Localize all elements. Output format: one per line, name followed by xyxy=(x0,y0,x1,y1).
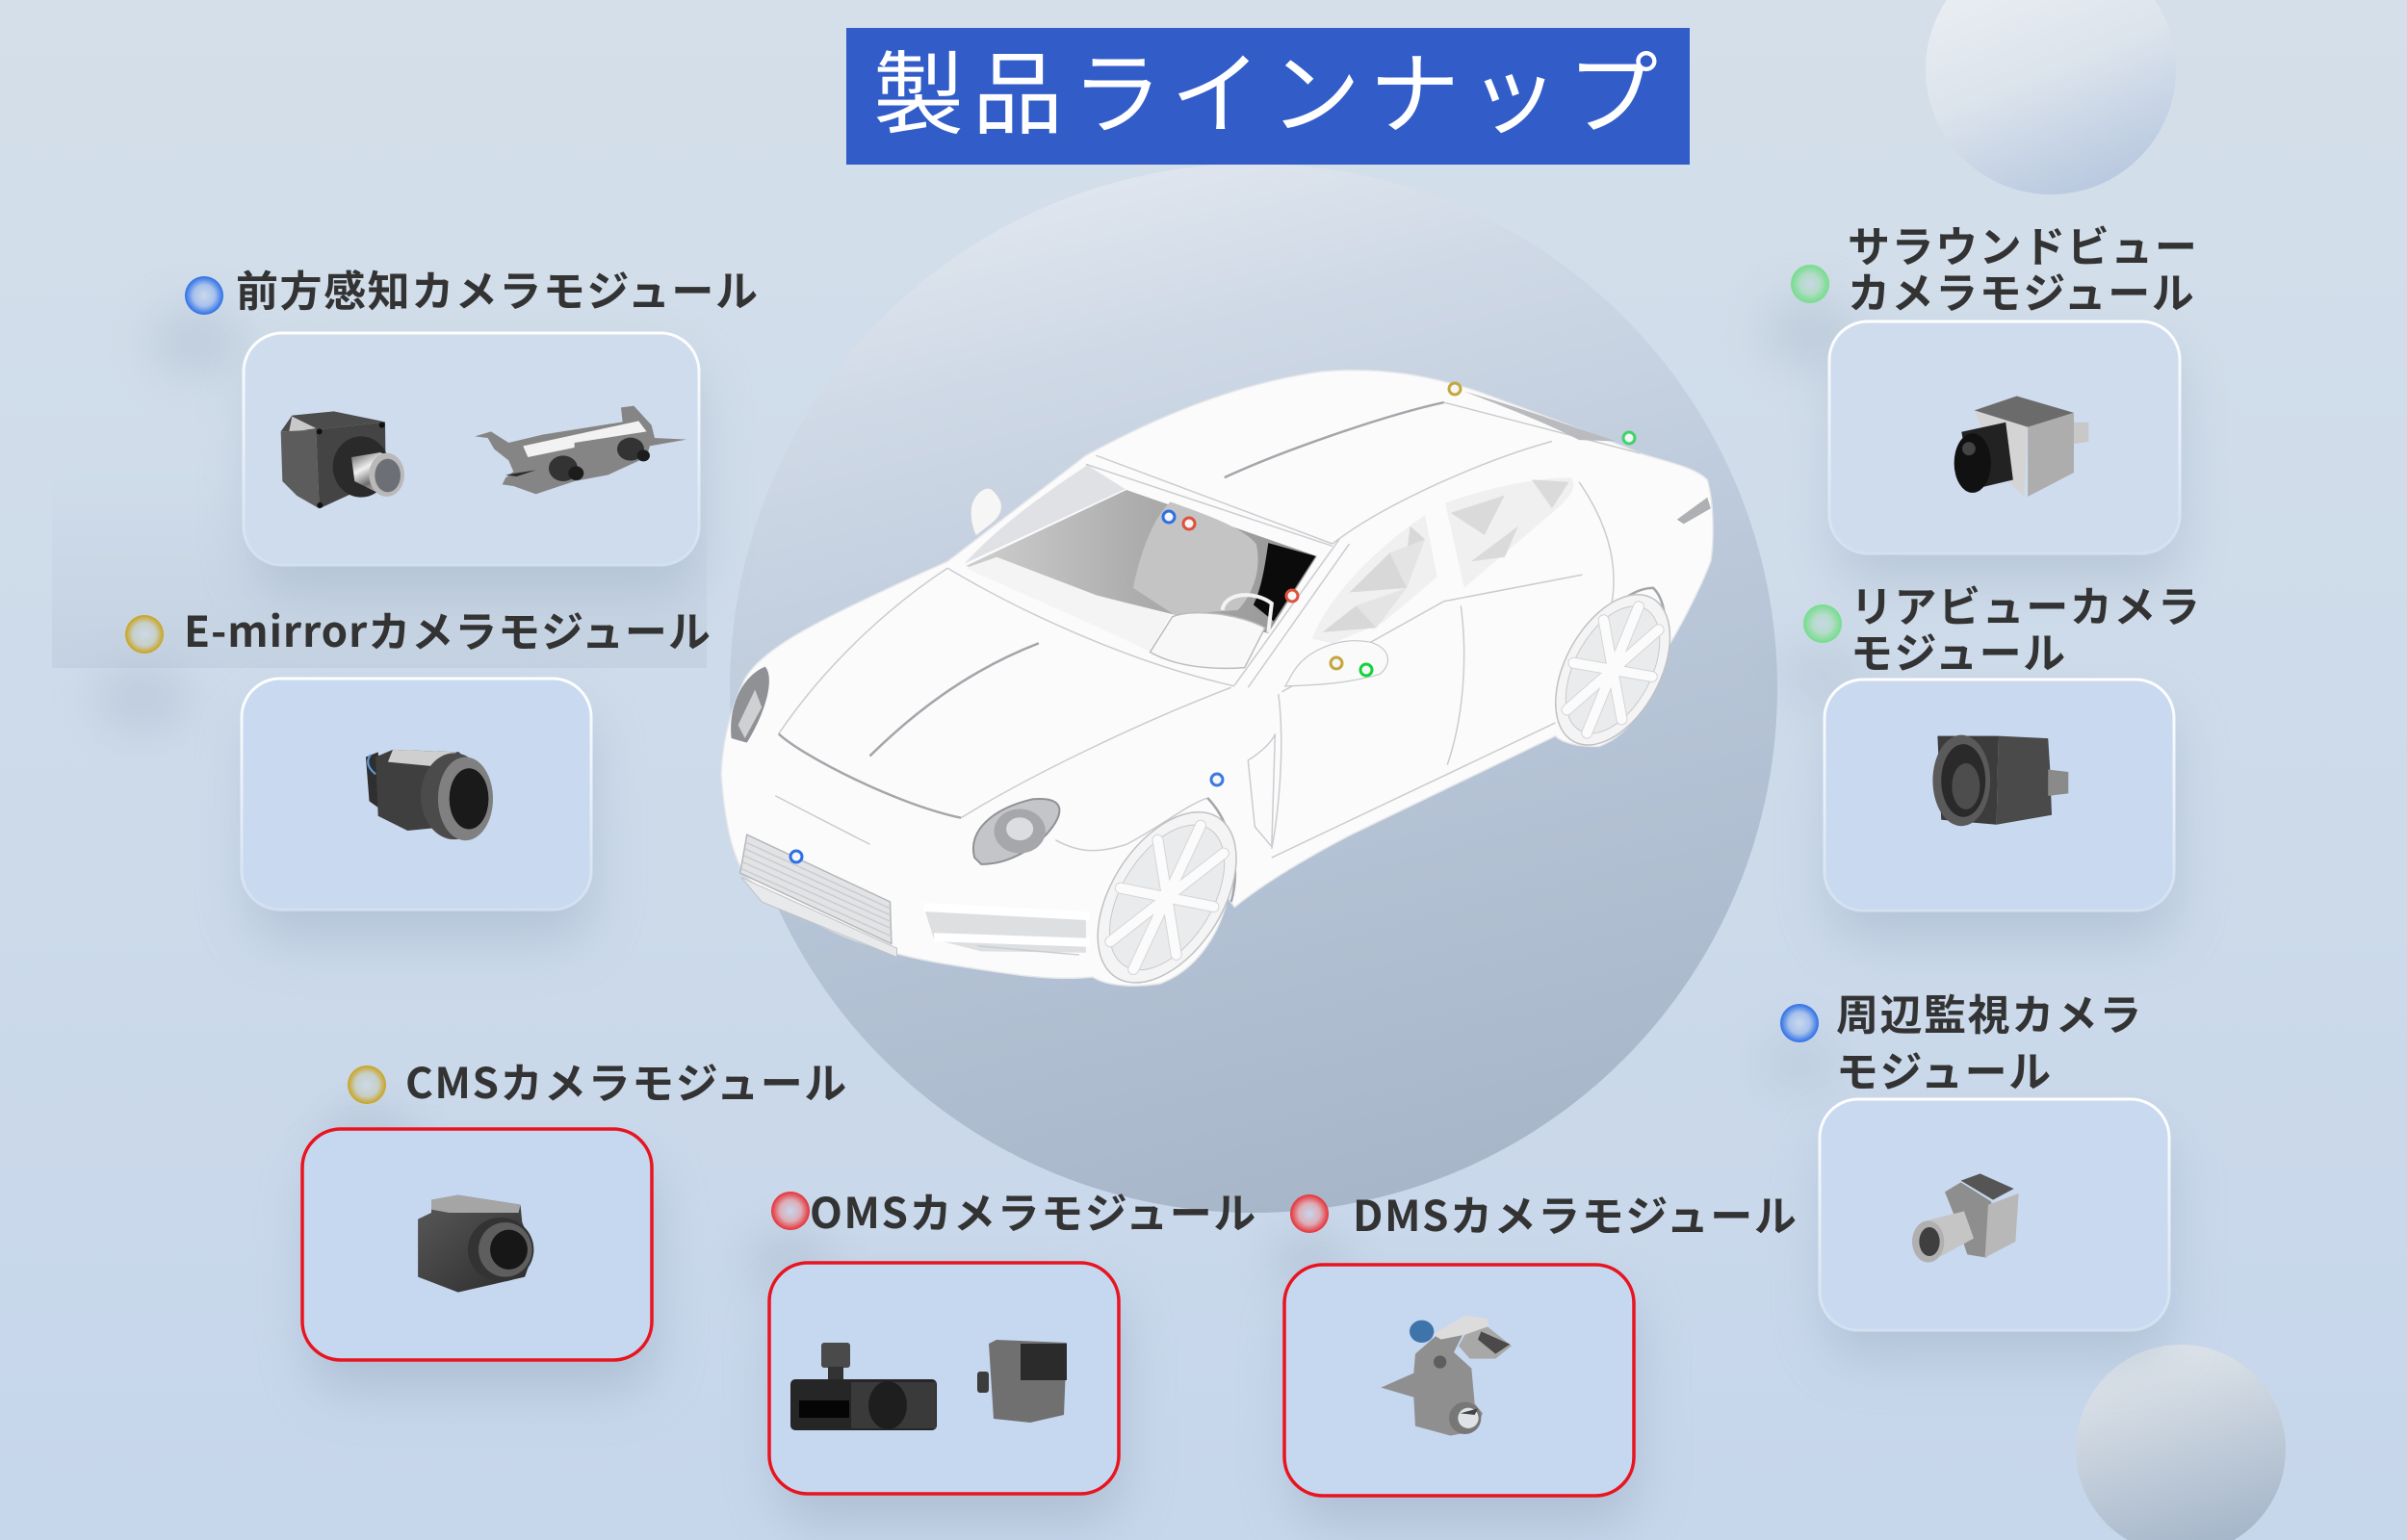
faint band behind left labels xyxy=(52,462,707,668)
car: dashboard top xyxy=(966,557,1171,653)
panel: 周辺監視カメラモジュール: モジュール xyxy=(1836,1038,2053,1099)
car: front side window xyxy=(1312,515,1437,643)
car: right headlight xyxy=(973,799,1059,864)
car: near-side mirror xyxy=(1285,641,1387,686)
icon: dark cube camera xyxy=(418,1195,533,1293)
car: rear side window xyxy=(1445,477,1574,588)
icon: silver angled camera xyxy=(1912,1173,2019,1263)
car: front grille xyxy=(740,834,896,957)
panel: リアビューカメラモジュール xyxy=(1774,573,2201,941)
heading: 周辺監視カメラ xyxy=(1836,981,2143,1042)
dot: red xyxy=(1290,1194,1329,1233)
icon: silver camera with dome lens xyxy=(1954,396,2088,497)
decorative ball: bottom right xyxy=(2076,1345,2286,1540)
icon: cube camera with wide lens xyxy=(366,750,493,840)
heading: OMSカメラモジュール xyxy=(810,1179,1257,1241)
heading: サラウンドビュー xyxy=(1848,213,2198,274)
central sphere backdrop xyxy=(730,164,1777,1213)
panel: サラウンドビューカメラモジュール xyxy=(1762,213,2198,584)
car: side air vents xyxy=(924,907,1089,955)
dot: blue xyxy=(185,276,223,315)
car: windshield glass xyxy=(965,465,1126,564)
heading: DMSカメラモジュール xyxy=(1353,1182,1798,1244)
panel: リアビューカメラモジュール: モジュール xyxy=(1851,619,2067,680)
car: body silhouette xyxy=(721,371,1713,986)
panel: サラウンドビューカメラモジュール: カメラモジュール xyxy=(1848,259,2195,321)
dot: green xyxy=(1791,265,1829,303)
heading: 前方感知カメラモジュール xyxy=(236,257,760,319)
car: left headlight xyxy=(731,667,769,743)
car: steering wheel xyxy=(1223,595,1272,632)
car: rear spoiler window strip xyxy=(1464,392,1617,441)
icon: in-cabin camera unit xyxy=(790,1343,937,1430)
car: rear wheel xyxy=(1534,586,1692,753)
heading: リアビューカメラ xyxy=(1851,573,2201,634)
panel: 前方感知カメラモジュール xyxy=(148,257,760,595)
heading: E-mirrorカメラモジュール xyxy=(184,598,712,659)
panel: E-mirrorカメラモジュール xyxy=(94,598,712,941)
car illustration xyxy=(721,371,1713,993)
heading: CMSカメラモジュール xyxy=(405,1049,848,1111)
dot: blue xyxy=(1780,1004,1819,1042)
dot: red xyxy=(771,1192,810,1230)
car: dark cabin corner xyxy=(1254,543,1315,621)
panel: CMSカメラモジュール xyxy=(302,1049,848,1391)
icon: black box camera xyxy=(1932,735,2068,826)
panel: 周辺監視カメラモジュール xyxy=(1757,981,2171,1360)
dot: green xyxy=(1803,604,1842,643)
car: front seats xyxy=(1133,501,1258,614)
panel: OMSカメラモジュール xyxy=(746,1179,1257,1523)
dot: gold xyxy=(125,615,164,654)
icon: stereo camera bracket xyxy=(475,406,686,494)
title: 製品ラインナップ xyxy=(873,22,1667,153)
decorative ball: top right xyxy=(1926,0,2176,194)
car: center console xyxy=(1151,613,1265,668)
car: far-side mirror xyxy=(971,488,1001,536)
icon: small upright camera xyxy=(977,1340,1067,1423)
car: front wheel xyxy=(1071,802,1263,993)
icon: square camera with lens xyxy=(281,411,404,508)
car: far tail light xyxy=(1677,498,1711,524)
icon: bracket driver camera xyxy=(1381,1316,1512,1436)
sensor markers on car xyxy=(790,383,1635,862)
car: body panel lines xyxy=(775,402,1666,902)
dot: gold xyxy=(348,1065,386,1104)
car: cabin interior xyxy=(966,490,1317,633)
panel: DMSカメラモジュール xyxy=(1271,1182,1798,1525)
